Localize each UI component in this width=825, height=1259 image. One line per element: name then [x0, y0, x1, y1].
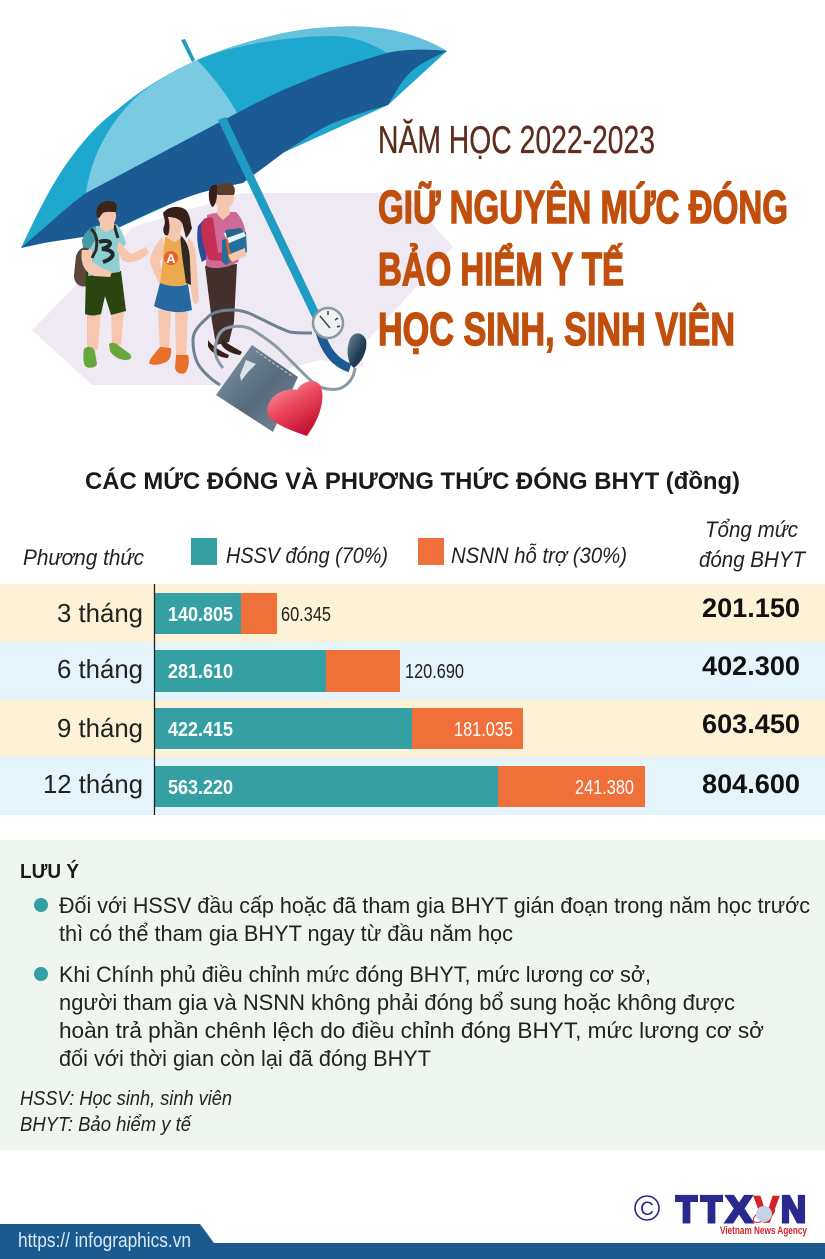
illustration: blood pressure cuff and gauge [193, 308, 366, 432]
note 2: đối với thời gian còn lại đã đóng BHYT [59, 1046, 431, 1071]
legend: NSNN hỗ trợ (30%) [451, 543, 627, 568]
row: 3 months [57, 593, 800, 634]
student: girl with orange top [149, 207, 199, 374]
logo: TTXVN: V [754, 1189, 779, 1230]
row: 12 months: 241.380 [575, 777, 634, 799]
subtitle: NĂM HỌC 2022-2023 [378, 119, 655, 162]
row: 3 months: 60.345 [281, 604, 331, 626]
main title: BẢO HIỂM Y TẾ [378, 243, 624, 295]
illustration: three students [74, 183, 247, 374]
note 1 [34, 893, 810, 946]
row: 3 months: 3 tháng [57, 598, 143, 628]
row: 12 months: 804.600 [702, 769, 800, 799]
illustration: umbrella [21, 26, 447, 319]
note 2: hoàn trả phần chênh lệch do điều chỉnh đóng BHYT, mức lương cơ sở [59, 1018, 764, 1043]
legend [191, 538, 627, 568]
row: 12 months: 12 tháng [43, 769, 143, 799]
student: girl with orange top: A [166, 251, 176, 266]
row: 6 months: 281.610 [168, 661, 233, 683]
logo: TTXVN: X [726, 1189, 752, 1230]
notes heading: LƯU Ý [20, 859, 80, 883]
row bands [0, 584, 825, 815]
logo: TTXVN: C [640, 1199, 654, 1220]
row: 3 months: 140.805 [168, 604, 233, 626]
row: 3 months: 201.150 [702, 593, 800, 623]
column header: total: Tổng mức [705, 517, 798, 542]
abbreviations [20, 1088, 232, 1136]
row: 6 months: 402.300 [702, 651, 800, 681]
note 1: thì có thể tham gia BHYT ngay từ đầu năm học [59, 921, 513, 946]
student: girl with books [197, 183, 247, 358]
row: 6 months: 6 tháng [57, 654, 143, 684]
main title [378, 181, 788, 355]
row: 9 months: 422.415 [168, 719, 233, 741]
row: 12 months [43, 766, 800, 807]
student: boy [74, 201, 149, 368]
footer url: https:// infographics.vn [18, 1230, 191, 1252]
column header: total: đóng BHYT [699, 547, 806, 572]
footer bar [0, 1224, 825, 1259]
background arrow shape [32, 193, 453, 385]
logo: TTXVN: T [701, 1189, 722, 1230]
note 2: Khi Chính phủ điều chỉnh mức đóng BHYT, mức lương cơ sở, [59, 962, 651, 987]
note 2: người tham gia và NSNN không phải đóng bổ sung hoặc không được [59, 990, 735, 1015]
note 1: Đối với HSSV đầu cấp hoặc đã tham gia BHYT gián đoạn trong năm học trước [59, 893, 810, 918]
logo: TTXVN: N [781, 1189, 806, 1230]
logo: TTXVN: T [676, 1189, 697, 1230]
column header: total [699, 517, 806, 572]
row: 6 months [57, 650, 800, 692]
section heading: CÁC MỨC ĐÓNG VÀ PHƯƠNG THỨC ĐÓNG BHYT (đồng) [85, 467, 740, 495]
abbreviations: HSSV: Học sinh, sinh viên [20, 1088, 232, 1110]
illustration: heart [267, 381, 322, 436]
abbreviations: BHYT: Bảo hiểm y tế [20, 1114, 193, 1136]
note 2 [34, 962, 764, 1071]
logo: TTXVN [635, 1189, 808, 1237]
row: 9 months: 603.450 [702, 709, 800, 739]
bar chart [43, 584, 800, 815]
column header: method: Phương thức [23, 545, 144, 570]
row: 6 months: 120.690 [405, 661, 464, 683]
panel: notes [0, 840, 825, 1150]
row: 9 months: 9 tháng [57, 713, 143, 743]
row: 12 months: 563.220 [168, 777, 233, 799]
row: 9 months [57, 708, 800, 749]
legend: HSSV đóng (70%) [226, 543, 388, 568]
row: 9 months: 181.035 [454, 719, 513, 741]
